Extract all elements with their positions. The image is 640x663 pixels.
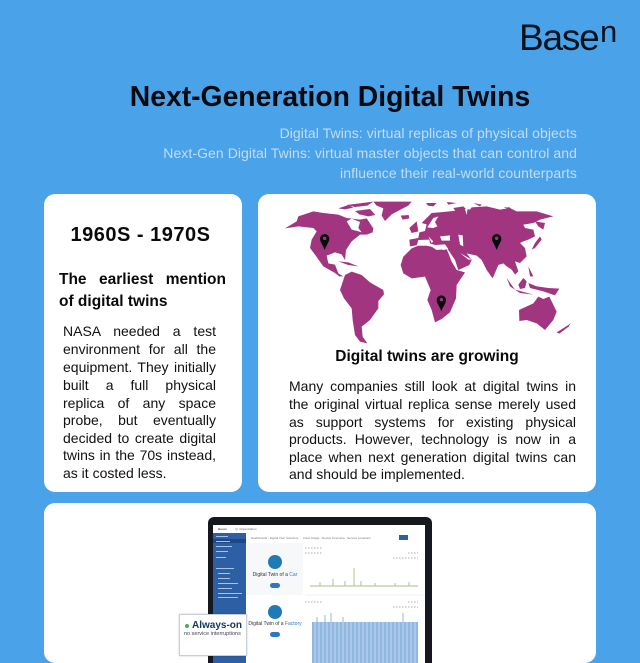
panel: dashboard screenshot	[44, 503, 596, 663]
bar chart	[312, 613, 418, 663]
sidebar	[213, 533, 246, 663]
subtitle text block	[163, 125, 577, 181]
panel body text: replica of any space	[63, 395, 216, 411]
toggle	[270, 583, 280, 588]
title: Next-Generation Digital Twins	[130, 80, 530, 112]
panel body text: Many companies still look at digital twins in	[289, 378, 576, 394]
panel body text	[63, 323, 216, 481]
top bar: Basen Q, Organization	[218, 527, 256, 531]
panel body text: NASA needed a test	[63, 323, 216, 339]
panel body text: twins in the 70s instead,	[63, 447, 216, 463]
icon: factory	[268, 605, 282, 619]
label: Digital Twin of a Car	[253, 572, 297, 578]
panel subheading: of digital twins	[59, 293, 168, 310]
world map	[285, 202, 571, 344]
logo: Basen: n	[600, 14, 617, 49]
breadcrumb bar: Dashboards › Digital Twin Solutions Fleet Usage Device Overview Service Locations	[251, 536, 371, 540]
Africa	[401, 246, 465, 322]
Kamchatka	[535, 221, 545, 230]
panel body text	[289, 378, 576, 482]
Arctic islands of Canada	[338, 205, 353, 209]
callout heading: Always-on	[192, 620, 242, 631]
panel body text: environment for all the	[63, 341, 216, 357]
panel body text: built a full physical	[63, 377, 216, 393]
Arctic islands of Eurasia	[426, 203, 437, 206]
panel body text: as support systems for existing physical	[289, 414, 576, 430]
panel body text: probe, but eventually	[63, 412, 216, 428]
logo: Basen: Base	[519, 17, 599, 58]
subtitle text block: Digital Twins: virtual replicas of physical objects	[280, 125, 577, 141]
icon: car	[268, 555, 282, 569]
callout: always-on	[179, 614, 247, 656]
panel: digital twins are growing	[258, 194, 596, 492]
label: Digital Twin of a Factory	[248, 621, 302, 627]
Cuba	[338, 261, 358, 266]
Iceland	[401, 215, 409, 220]
panel body text: equipment. They initially	[63, 359, 216, 375]
panel heading: dates: 1960S - 1970S	[71, 224, 210, 246]
Eurasia	[409, 206, 553, 278]
twin card: factory	[247, 595, 303, 663]
South America	[340, 272, 384, 343]
subtitle text block: influence their real-world counterparts	[340, 165, 577, 181]
panel body text: the original virtual replica sense merely used	[289, 396, 576, 412]
charts	[305, 548, 425, 663]
twin card: car	[247, 543, 303, 595]
Australia and New Zealand	[519, 297, 557, 330]
toggle	[270, 632, 280, 637]
subtitle text block: Next-Gen Digital Twins: virtual master objects that can control and	[163, 145, 577, 161]
panel heading: Digital twins are growing	[335, 348, 519, 365]
pin: North America	[320, 234, 329, 250]
laptop screen	[213, 525, 425, 663]
Japan	[532, 236, 542, 250]
panel body text: decided to create digital	[63, 430, 216, 446]
panel body text: and should be implemented.	[289, 466, 465, 482]
line chart	[305, 548, 418, 607]
status dot	[185, 624, 189, 628]
laptop mockup	[208, 517, 432, 663]
Southeast Asia and Indonesia	[507, 278, 533, 295]
British Isles	[409, 221, 418, 233]
pin: Africa	[437, 295, 446, 311]
panel subheading	[59, 271, 226, 310]
button	[399, 535, 408, 540]
sidebar rows	[216, 536, 242, 598]
sidebar active row	[213, 539, 246, 543]
pin: Asia	[492, 234, 501, 250]
panel: 1960s history	[44, 194, 242, 492]
Greenland	[373, 202, 412, 221]
panel body text: place when next generation digital twins can	[289, 449, 576, 465]
panel body text: as it costed less.	[63, 465, 166, 481]
panel body text: products. However, technology is now in a	[289, 431, 576, 447]
callout text: no service interruptions	[184, 631, 241, 637]
inland waters	[347, 208, 472, 260]
North America	[285, 211, 373, 276]
panel subheading: The earliest mention	[59, 271, 226, 288]
